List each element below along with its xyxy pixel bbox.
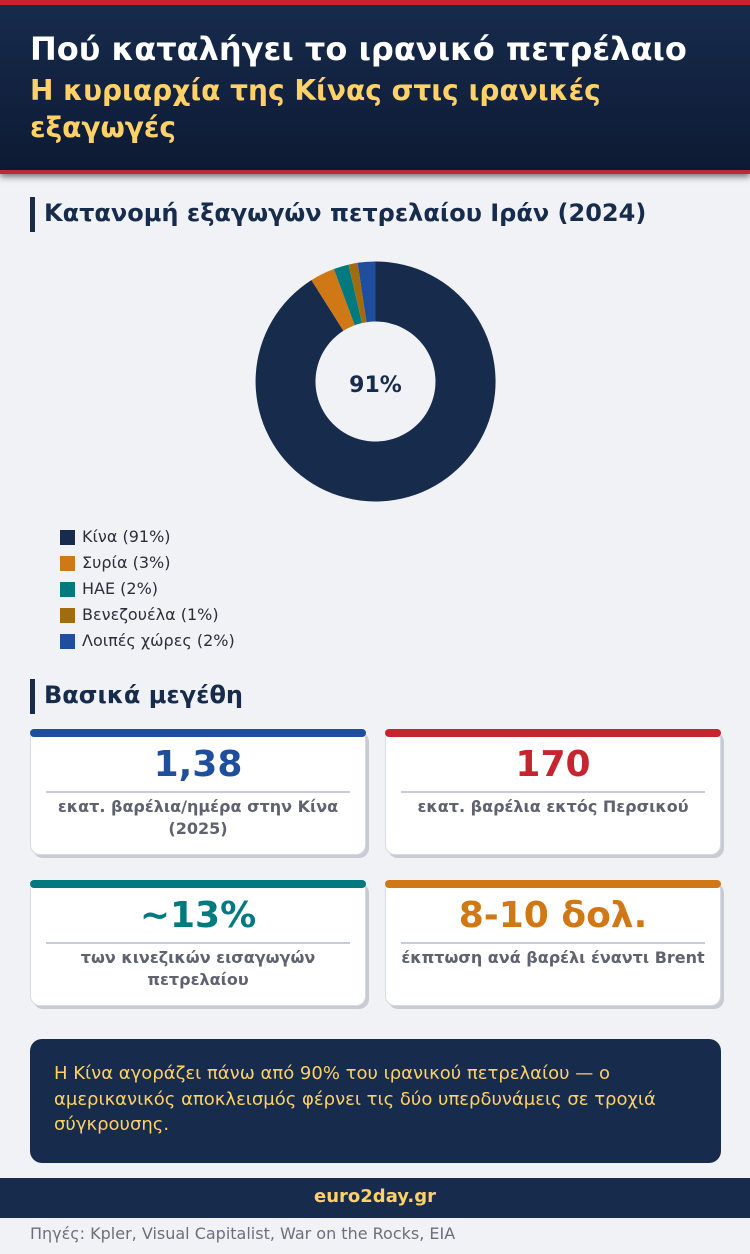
- card: share of Chinese imports: [30, 880, 366, 1006]
- card: China volume: [30, 729, 366, 855]
- description: εκατ. βαρέλια/ημέρα στην Κίνα: [58, 797, 338, 816]
- description: των κινεζικών εισαγωγών: [81, 948, 315, 967]
- legend label: Venezuela: Βενεζουέλα (1%): [82, 605, 219, 624]
- description: πετρελαίου: [147, 970, 249, 989]
- value: 170: [515, 744, 591, 785]
- footer brand bar: euro2day.gr: [314, 1186, 436, 1207]
- slice: Syria: [311, 269, 355, 331]
- description: [58, 797, 338, 838]
- card: barrels outside the Gulf: [385, 729, 721, 855]
- callout: αμερικανικός αποκλεισμός φέρνει τις δύο υπερδυνάμεις σε τροχιά: [54, 1088, 656, 1110]
- legend swatch: China: [60, 530, 75, 545]
- legend label: UAE: ΗΑΕ (2%): [82, 579, 158, 598]
- header banner: [0, 0, 750, 174]
- title: Πού καταλήγει το ιρανικό πετρέλαιο: [30, 30, 687, 68]
- slice: UAE: [334, 265, 362, 325]
- card: discount: [385, 880, 721, 1006]
- value: 8-10 δολ.: [459, 895, 647, 936]
- legend label: China: Κίνα (91%): [82, 527, 171, 546]
- footer brand bar: [0, 1178, 750, 1218]
- slice: China: [256, 262, 496, 501]
- section heading: key figures: Βασικά μεγέθη: [44, 681, 243, 709]
- description: έκπτωση ανά βαρέλι έναντι Brent: [401, 948, 705, 967]
- description: εκατ. βαρέλια εκτός Περσικού: [418, 797, 688, 816]
- value: 1,38: [154, 744, 242, 785]
- section heading: allocation: Κατανομή εξαγωγών πετρελαίου Ιράν (2024): [44, 199, 646, 227]
- callout: σύγκρουσης.: [54, 1114, 169, 1135]
- legend: [60, 527, 235, 650]
- sources: Πηγές: Kpler, Visual Capitalist, War on the Rocks, EIA: [30, 1224, 455, 1243]
- description: (2025): [168, 819, 228, 838]
- legend swatch: Venezuela: [60, 608, 75, 623]
- legend swatch: others: [60, 634, 75, 649]
- donut chart: [256, 262, 496, 502]
- legend label: others: Λοιπές χώρες (2%): [82, 631, 235, 650]
- callout: Η Κίνα αγοράζει πάνω από 90% του ιρανικού πετρελαίου — ο: [54, 1063, 610, 1084]
- description: [81, 948, 315, 989]
- slice: Venezuela: [348, 263, 366, 323]
- legend swatch: UAE: [60, 582, 75, 597]
- donut center value: 91%: [349, 373, 402, 398]
- legend swatch: Syria: [60, 556, 75, 571]
- legend label: Syria: Συρία (3%): [82, 553, 170, 572]
- value: ~13%: [140, 895, 256, 936]
- slice: others: [358, 261, 376, 322]
- subtitle: Η κυριαρχία της Κίνας στις ιρανικές εξαγωγές: [30, 74, 601, 144]
- callout: [30, 1039, 721, 1163]
